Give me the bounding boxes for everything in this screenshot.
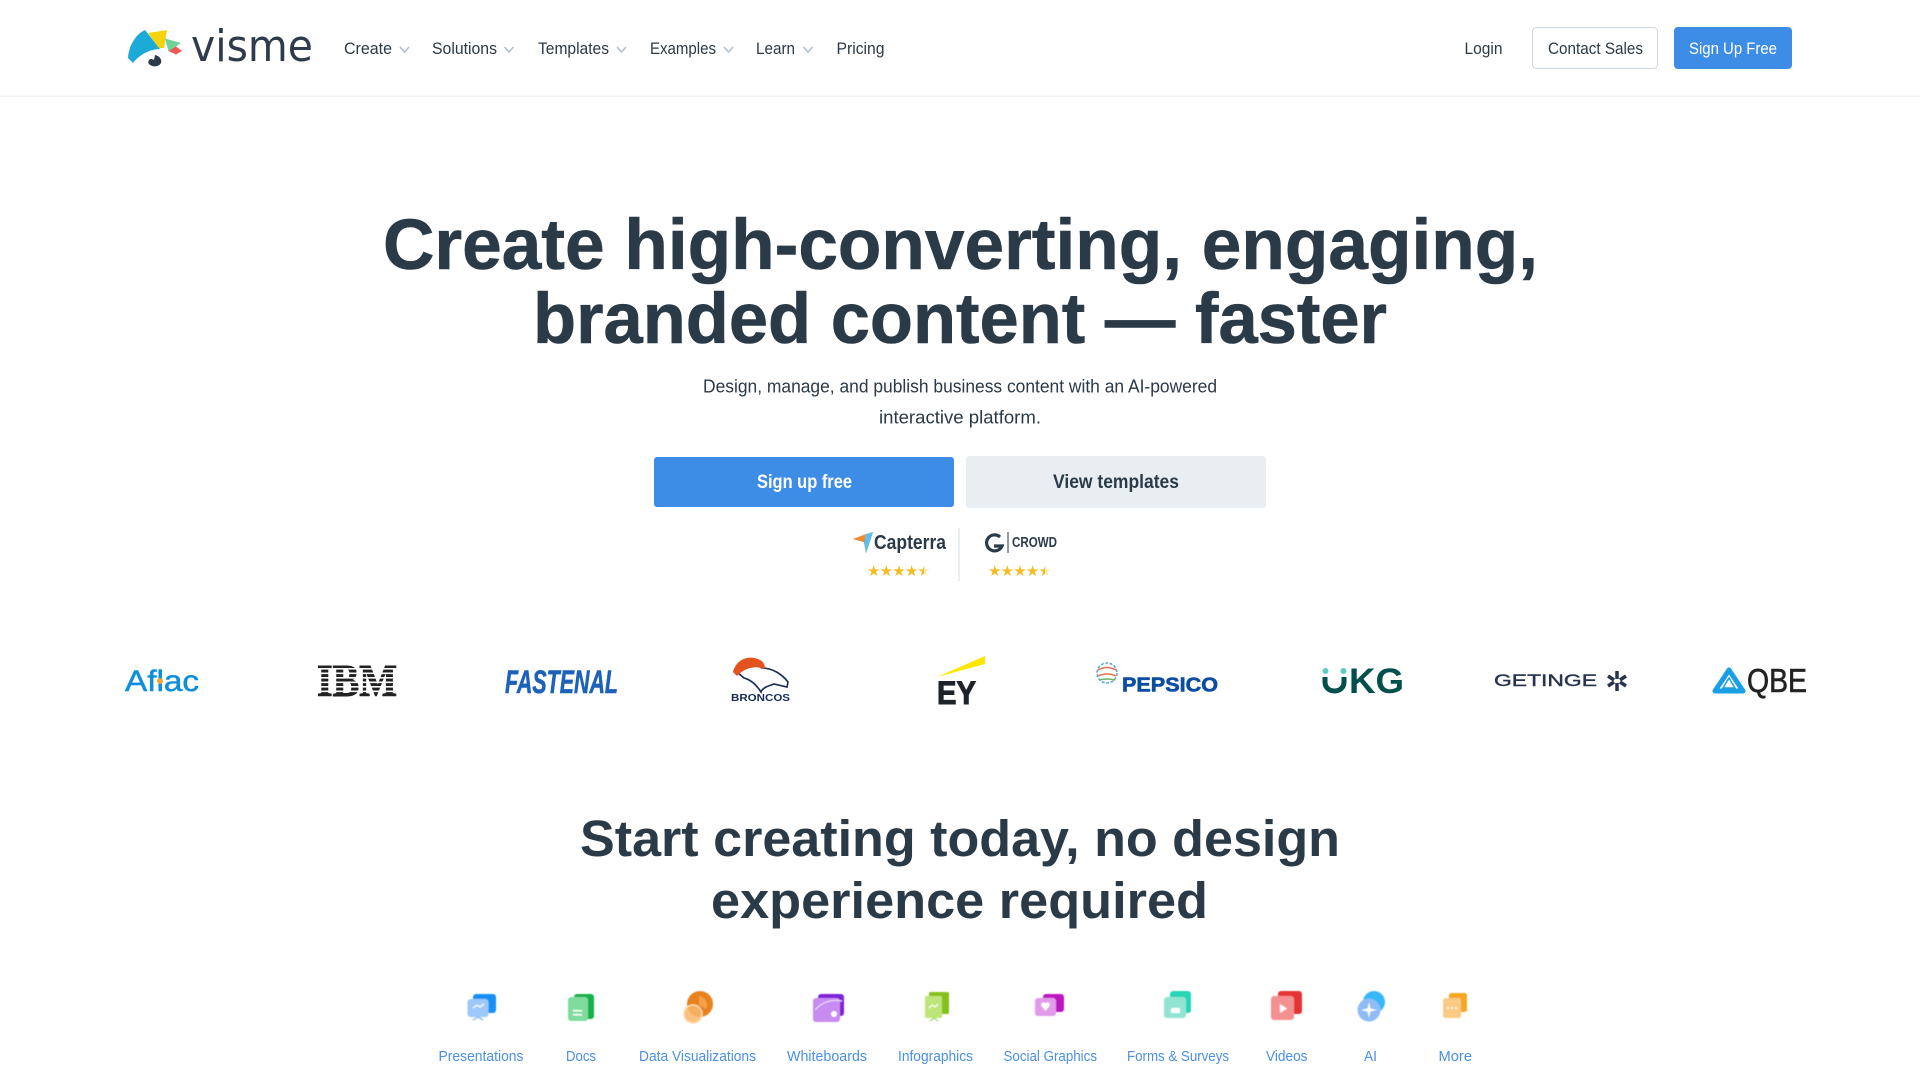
nav menu: Learn (756, 40, 795, 58)
category: more: More (1438, 1049, 1472, 1065)
button: sign up free primary: Sign up free (757, 472, 852, 493)
logo: qbe: QBE (1747, 662, 1807, 699)
logo: ukg (1322, 662, 1404, 701)
icon: social graphics (1035, 994, 1064, 1016)
icon: presentations (468, 994, 496, 1020)
nav menu: Solutions (432, 40, 497, 58)
logo: ey: EY (937, 675, 976, 711)
nav menu: Create (344, 40, 392, 58)
category: presentations: Presentations (438, 1049, 524, 1065)
title: branded content — faster (533, 280, 1387, 359)
logo: pepsico: PEPSICO (1122, 674, 1218, 696)
category: forms and surveys: Forms & Surveys (1127, 1049, 1229, 1065)
rating: g2 crowd: CROWD (1012, 535, 1057, 551)
button: contact sales (1532, 28, 1658, 68)
icon: videos (1271, 991, 1302, 1020)
icon: forms and surveys (1164, 991, 1191, 1018)
icon: data visualizations (684, 991, 713, 1023)
logo: visme (128, 21, 313, 72)
title (383, 206, 1538, 359)
logo: pepsico (1097, 663, 1218, 696)
category: infographics: Infographics (898, 1049, 973, 1065)
category: presentations (438, 994, 524, 1065)
title: Create high-converting, engaging, (383, 206, 1538, 285)
category: forms and surveys (1127, 991, 1229, 1065)
rating: capterra: Capterra (874, 532, 947, 554)
category: social graphics (1004, 994, 1097, 1065)
section heading: experience required (711, 872, 1208, 929)
subtitle: Design, manage, and publish business content with an AI-powered (703, 376, 1217, 396)
login link: Login (1464, 40, 1502, 58)
button: contact sales: Contact Sales (1548, 40, 1643, 58)
category: whiteboards: Whiteboards (787, 1049, 867, 1065)
logo: fastenal: FASTENAL (505, 664, 618, 700)
rating: capterra (853, 532, 947, 580)
logo: qbe (1715, 662, 1807, 699)
logo: getinge (1494, 671, 1626, 691)
icon: more (1443, 993, 1467, 1018)
logo: broncos (731, 658, 790, 704)
rating: g2 crowd (987, 532, 1057, 580)
logo: getinge: GETINGE (1494, 671, 1597, 690)
logo: ibm: IBM (317, 656, 397, 706)
nav menu: Examples (650, 40, 716, 58)
category: videos (1266, 991, 1308, 1065)
icon: ai (1358, 991, 1385, 1022)
divider (958, 528, 960, 581)
category: docs: Docs (566, 1049, 596, 1065)
logo: broncos: BRONCOS (731, 692, 790, 704)
rating: capterra: ★★★★★ (867, 562, 931, 580)
nav menu (344, 40, 884, 58)
rating: g2 crowd: ★★★★★ (988, 562, 1052, 580)
category: ai: AI (1364, 1049, 1377, 1065)
logo: aflac: Aflac (125, 665, 199, 698)
logo: ukg: KG (1349, 662, 1404, 701)
icon: docs (568, 994, 594, 1021)
category: data visualizations: Data Visualizations (639, 1049, 756, 1065)
button: view templates: View templates (1053, 472, 1179, 493)
category: data visualizations (639, 991, 756, 1065)
subtitle (703, 376, 1217, 428)
category: ai (1358, 991, 1385, 1065)
logo: ey (937, 656, 985, 711)
navigation bar (0, 0, 1920, 97)
logo: visme: visme (191, 21, 313, 72)
button: view templates (966, 456, 1266, 508)
category: docs (566, 994, 596, 1065)
category: videos: Videos (1266, 1049, 1308, 1065)
nav menu: Templates (538, 40, 609, 58)
category: more (1438, 993, 1472, 1065)
section heading (580, 810, 1340, 929)
button: sign up free: Sign Up Free (1689, 40, 1777, 58)
nav menu: Pricing (836, 40, 884, 58)
button: sign up free primary (654, 457, 954, 507)
category: whiteboards (787, 994, 867, 1065)
category: infographics (898, 992, 973, 1065)
icon: infographics (925, 992, 949, 1021)
customer logos (125, 656, 1807, 711)
subtitle: interactive platform. (879, 406, 1041, 428)
category: social graphics: Social Graphics (1004, 1049, 1097, 1065)
button: sign up free (1674, 27, 1792, 69)
icon: whiteboards (813, 994, 844, 1022)
section heading: Start creating today, no design (580, 810, 1340, 867)
